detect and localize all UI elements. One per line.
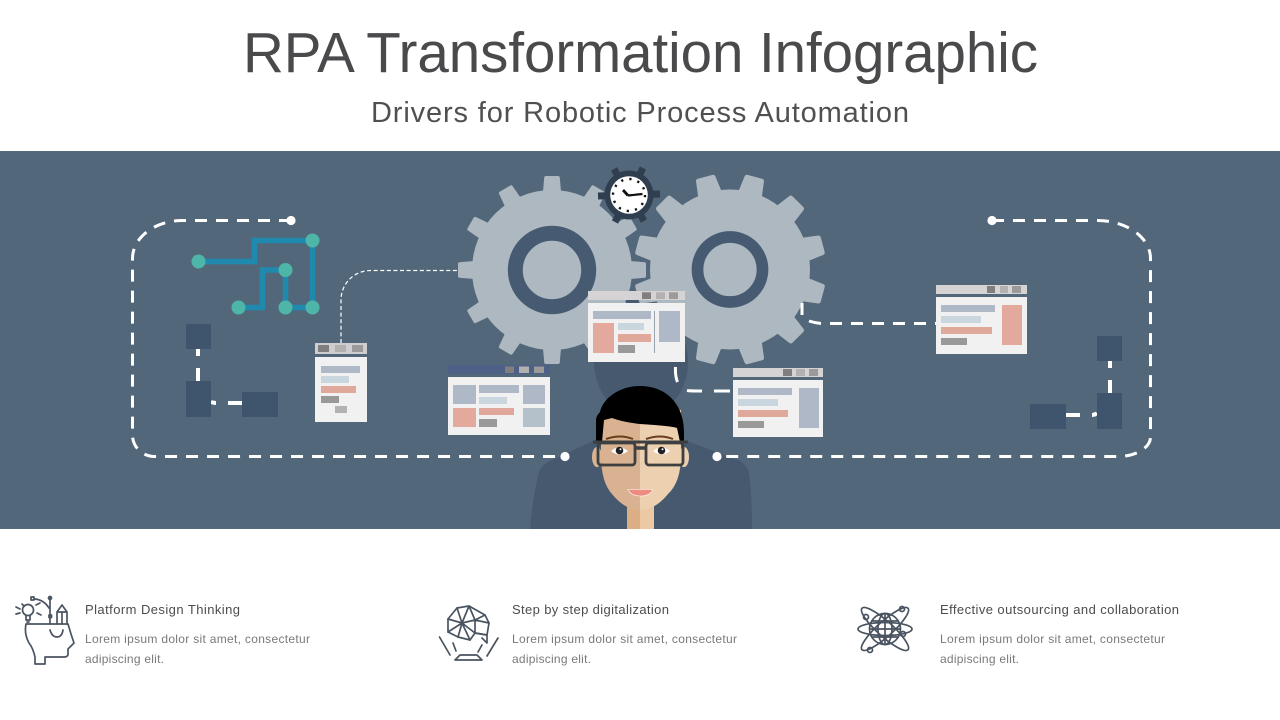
dot: right loop top <box>987 216 997 225</box>
dashed connector: gears to lower right window <box>675 367 730 391</box>
heading: Effective outsourcing and collaboration <box>940 602 1179 617</box>
circuit diagram <box>192 234 320 314</box>
glasses <box>593 442 688 465</box>
gear: right <box>634 174 826 365</box>
icon: stopwatch clock <box>598 168 660 222</box>
feature: step by step digitalization <box>440 602 737 666</box>
mouth <box>628 490 653 496</box>
window: small left <box>315 343 367 422</box>
face <box>601 410 681 510</box>
gear: left <box>458 176 646 364</box>
icon: head with ideas <box>16 596 74 664</box>
body text: Lorem ipsum dolor sit amet, consectetur <box>940 632 1165 646</box>
flow blocks: right <box>1030 336 1122 429</box>
dashed connector: left loop <box>132 220 565 456</box>
dot: left loop bottom <box>560 452 570 461</box>
body text line 2: adipiscing elit. <box>940 652 1019 666</box>
body text: Lorem ipsum dolor sit amet, consectetur <box>512 632 737 646</box>
window: center <box>588 291 685 362</box>
subtitle: Drivers for Robotic Process Automation <box>371 97 909 129</box>
icon: network brain <box>440 606 498 660</box>
hair <box>596 386 684 442</box>
icon: globe with orbits <box>857 603 913 655</box>
panel: main illustration <box>0 151 1280 529</box>
heading: Step by step digitalization <box>512 602 669 617</box>
dot: left loop top <box>286 216 296 225</box>
person <box>530 386 752 529</box>
window: lower left <box>448 365 550 435</box>
feature: effective outsourcing <box>857 602 1179 666</box>
dashed connector: gears to right window <box>802 303 936 324</box>
window: right <box>936 285 1027 354</box>
window: lower right <box>733 368 823 437</box>
body text line 2: adipiscing elit. <box>85 652 164 666</box>
feature: platform design thinking <box>16 596 310 666</box>
neck <box>627 495 654 529</box>
eyes <box>611 447 670 454</box>
heading: Platform Design Thinking <box>85 602 240 617</box>
body text: Lorem ipsum dolor sit amet, consectetur <box>85 632 310 646</box>
body text line 2: adipiscing elit. <box>512 652 591 666</box>
body <box>530 441 752 529</box>
flow blocks: left <box>186 324 278 417</box>
ears <box>592 447 689 467</box>
head shadow <box>594 307 688 417</box>
title: RPA Transformation Infographic <box>243 21 1038 84</box>
eyebrows <box>606 436 673 439</box>
thin dashed connector <box>341 270 457 343</box>
dashed connector: right loop <box>717 220 1150 457</box>
dot: right loop bottom <box>712 452 722 461</box>
